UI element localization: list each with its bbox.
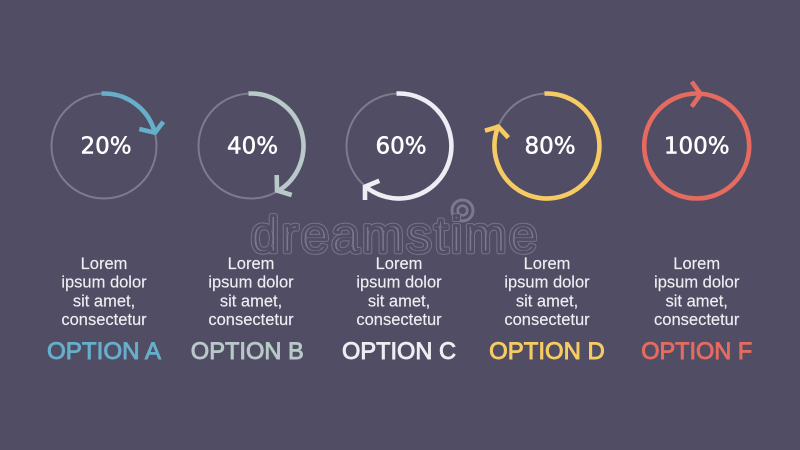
watermark: [251, 200, 537, 263]
panel: option F 100%: [641, 82, 752, 365]
description: sit amet,: [666, 292, 728, 310]
progress ring track: [52, 94, 156, 198]
progress arc with arrow: [485, 94, 599, 199]
progress ring track: [346, 94, 452, 198]
progress ring track: [198, 94, 304, 198]
panel: option D 80%: [485, 94, 605, 365]
description: consectetur: [654, 311, 740, 329]
progress arc with arrow: [102, 93, 163, 133]
option label: OPTION F: [641, 338, 752, 365]
description: Lorem: [673, 255, 720, 273]
watermark wordmark inner: dreamstime: [251, 207, 537, 263]
watermark spiral icon: [452, 200, 473, 221]
panel: option A 20%: [47, 93, 163, 365]
description: Lorem: [376, 255, 422, 273]
description: ipsum dolor: [356, 274, 442, 292]
option label: OPTION B: [191, 338, 304, 365]
percentage: 100%: [664, 134, 730, 160]
progress ring with arrow: [644, 82, 749, 198]
description: Lorem: [228, 255, 274, 273]
description: sit amet,: [220, 292, 282, 310]
panel: option C 60%: [342, 94, 456, 365]
description: Lorem: [81, 255, 127, 273]
description: ipsum dolor: [504, 274, 590, 292]
description: sit amet,: [73, 292, 135, 310]
description: sit amet,: [516, 292, 578, 310]
description: ipsum dolor: [654, 274, 740, 292]
percentage: 80%: [524, 134, 576, 160]
description: consectetur: [356, 311, 442, 329]
progress ring track: [494, 94, 600, 198]
description: Lorem: [524, 255, 570, 273]
option label: OPTION C: [342, 338, 456, 365]
percentage: 60%: [375, 134, 427, 160]
percentage: 40%: [227, 134, 278, 160]
description: sit amet,: [368, 292, 430, 310]
option label: OPTION D: [489, 338, 605, 365]
progress arc with arrow: [248, 94, 303, 195]
description: consectetur: [61, 311, 147, 329]
description: ipsum dolor: [208, 274, 294, 292]
description: consectetur: [504, 311, 590, 329]
watermark wordmark outline: dreamstime: [251, 207, 537, 263]
option label: OPTION A: [47, 338, 161, 365]
panel: option B 40%: [191, 94, 304, 365]
progress arc with arrow: [365, 94, 451, 200]
percentage: 20%: [80, 134, 132, 160]
description: consectetur: [208, 311, 294, 329]
description: ipsum dolor: [61, 274, 147, 292]
